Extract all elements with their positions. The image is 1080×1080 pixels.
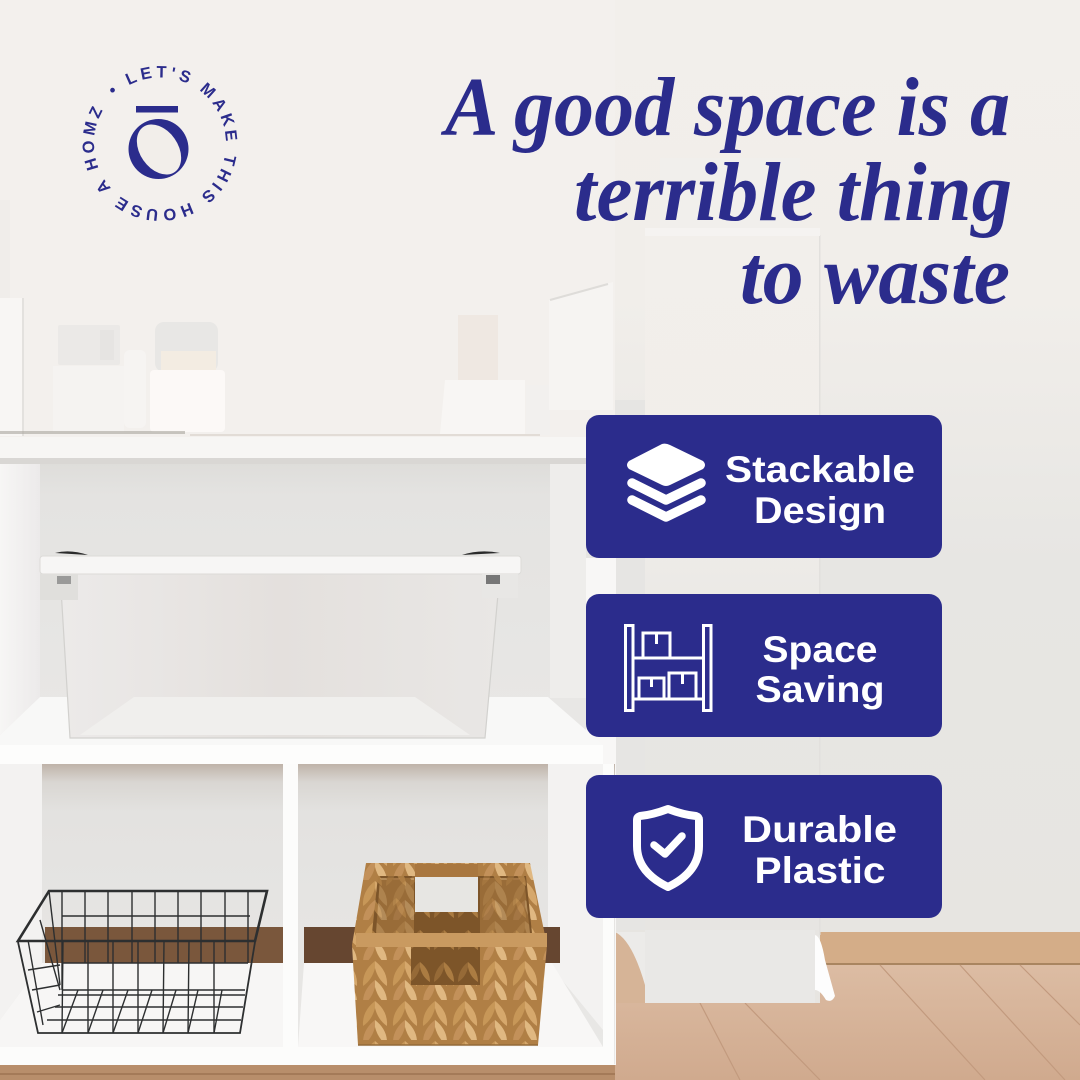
card: stackable design — [586, 415, 942, 558]
items on top shelf — [0, 200, 613, 436]
woven basket — [352, 863, 547, 1045]
wood floor and baseboard — [0, 932, 1080, 1080]
card: stackable design: Design — [754, 490, 886, 531]
card: durable plastic — [586, 775, 942, 918]
card: space saving — [586, 594, 942, 737]
icon: stacked layers — [627, 444, 705, 517]
headline — [440, 61, 1012, 322]
icon: shield with check — [637, 809, 699, 887]
wire basket — [18, 891, 267, 1033]
icon: shelf with boxes — [626, 626, 711, 710]
shelf unit — [0, 437, 616, 1065]
logo ring text: • LET'S MAKE THIS HOUSE A HOMZ — [82, 66, 238, 221]
tall white cabinet — [615, 158, 835, 1003]
card: durable plastic: Durable — [742, 809, 897, 850]
headline: to waste — [740, 229, 1010, 322]
card: space saving: Space — [762, 629, 878, 670]
card: space saving: Saving — [756, 669, 884, 710]
headline: A good space is a — [440, 61, 1010, 154]
card: durable plastic: Plastic — [754, 850, 886, 891]
card: stackable design: Stackable — [725, 449, 915, 490]
logo badge — [82, 66, 238, 221]
headline: terrible thing — [574, 146, 1012, 239]
clear storage bin — [40, 551, 521, 738]
